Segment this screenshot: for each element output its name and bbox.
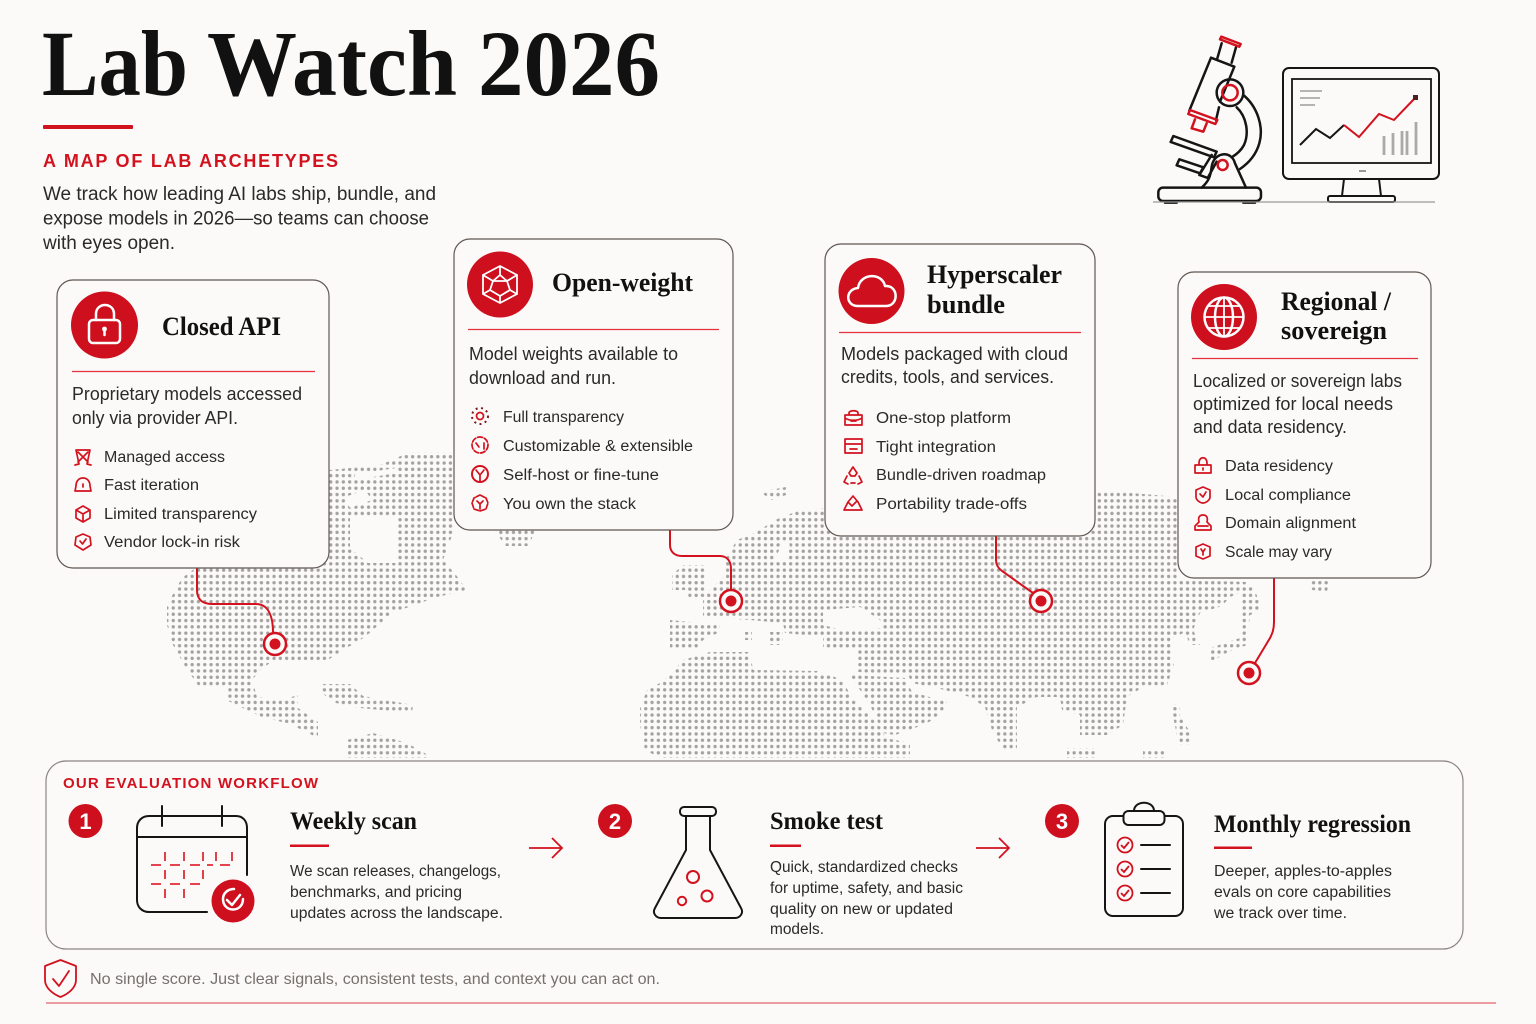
list: regional traits	[1195, 458, 1357, 561]
panel: Closed API	[57, 280, 329, 568]
icon: cloud	[838, 258, 904, 324]
heading: Closed API	[162, 312, 281, 341]
step 2 text: for uptime, safety, and basic	[770, 880, 963, 897]
heading: Regional /	[1281, 287, 1392, 316]
description: optimized for local needs	[1193, 394, 1393, 414]
title	[42, 13, 660, 116]
intro text	[42, 184, 436, 254]
workflow heading: OUR EVALUATION WORKFLOW	[63, 775, 319, 792]
step 3 badge	[1045, 804, 1079, 838]
description	[72, 384, 302, 428]
list: closed API traits	[75, 449, 257, 551]
description	[1193, 371, 1402, 437]
step 2 text: Quick, standardized checks	[770, 859, 958, 876]
step 3 text: Deeper, apples-to-apples	[1214, 863, 1392, 880]
heading	[927, 260, 1062, 319]
intro text: with eyes open.	[42, 233, 175, 254]
step 1 badge: 1	[79, 809, 92, 834]
description: Models packaged with cloud	[841, 344, 1068, 364]
description: Localized or sovereign labs	[1193, 371, 1402, 391]
intro text: expose models in 2026—so teams can choose	[43, 208, 429, 230]
list: closed API traits: Managed access	[104, 449, 225, 466]
footer note: No single score. Just clear signals, consistent tests, and context you can act on.	[90, 971, 660, 988]
panel: Hyperscaler bundle	[825, 244, 1095, 536]
list: regional traits: Domain alignment	[1225, 515, 1357, 532]
connector: open-weight to pin	[670, 530, 742, 612]
pin: hyperscaler	[1030, 590, 1052, 612]
step 2 text: quality on new or updated	[770, 901, 953, 918]
step 3 badge: 3	[1056, 809, 1068, 834]
icon: shield check	[45, 960, 76, 997]
connector: hyperscaler to pin	[996, 536, 1052, 612]
panel: evaluation workflow	[46, 761, 1463, 949]
list: hyperscaler traits: Bundle-driven roadmap	[876, 467, 1046, 484]
list: closed API traits: Vendor lock-in risk	[104, 534, 240, 551]
arrow: step 1 to step 2	[529, 838, 562, 858]
step 1 text: updates across the landscape.	[290, 905, 503, 922]
description: download and run.	[469, 368, 616, 388]
icon: lock	[71, 292, 138, 358]
icon: calendar	[137, 806, 254, 922]
icon: flask	[654, 807, 742, 918]
list: open-weight traits: Customizable & extensible	[503, 438, 693, 455]
illustration: microscope	[1158, 37, 1261, 203]
heading: Hyperscaler	[927, 260, 1062, 289]
pin: open-weight	[720, 590, 742, 612]
list: hyperscaler traits: Tight integration	[876, 439, 996, 456]
title: Lab	[42, 13, 188, 116]
step 1 text: We scan releases, changelogs,	[290, 863, 501, 880]
step 2 text: models.	[770, 921, 824, 938]
step 2 heading: Smoke test	[770, 808, 884, 835]
pin: regional	[1238, 662, 1260, 684]
step 3 heading: Monthly regression	[1214, 811, 1411, 838]
list: regional traits: Local compliance	[1225, 487, 1351, 504]
step 1 text: benchmarks, and pricing	[290, 884, 462, 901]
description: credits, tools, and services.	[841, 367, 1054, 387]
list: closed API traits: Limited transparency	[104, 506, 257, 523]
step 3 text	[1213, 863, 1392, 922]
icon: clipboard	[1105, 803, 1183, 916]
panel: Open-weight	[454, 239, 733, 530]
step 2 badge	[598, 804, 632, 838]
heading: sovereign	[1281, 316, 1388, 345]
connector: closed API to pin	[197, 568, 286, 655]
description: only via provider API.	[72, 408, 238, 428]
list: closed API traits: Fast iteration	[104, 477, 199, 494]
section kicker: A MAP OF LAB ARCHETYPES	[43, 151, 338, 171]
arrow: step 2 to step 3	[976, 838, 1009, 858]
step 1 badge	[68, 804, 102, 838]
description: and data residency.	[1193, 417, 1347, 437]
dotted world map	[160, 445, 1340, 759]
title: 2026	[478, 13, 660, 116]
description	[841, 344, 1068, 387]
list: hyperscaler traits: Portability trade-offs	[876, 496, 1027, 513]
heading	[1281, 287, 1392, 345]
description	[469, 344, 678, 388]
list: open-weight traits: Self-host or fine-tune	[503, 467, 659, 484]
heading: Open-weight	[552, 268, 693, 297]
list: hyperscaler traits: One-stop platform	[876, 410, 1011, 427]
list: regional traits: Data residency	[1225, 458, 1333, 475]
panel: Regional / sovereign	[1178, 272, 1431, 578]
step 2 text	[770, 859, 963, 938]
icon: network cube	[467, 252, 533, 318]
list: open-weight traits: Full transparency	[503, 409, 624, 426]
step 3 text: evals on core capabilities	[1214, 884, 1391, 901]
list: open-weight traits: You own the stack	[503, 496, 636, 513]
list: regional traits: Scale may vary	[1225, 544, 1332, 561]
step 1 text	[290, 863, 503, 922]
step 3 text: we track over time.	[1213, 905, 1347, 922]
list: open-weight traits	[472, 408, 693, 513]
description: Model weights available to	[469, 344, 678, 364]
step 2 badge: 2	[609, 809, 621, 834]
list: hyperscaler traits	[844, 410, 1046, 513]
step 1 heading: Weekly scan	[290, 808, 417, 835]
intro text: We track how leading AI labs ship, bundle, and	[43, 184, 436, 205]
connector: regional to pin	[1238, 578, 1274, 684]
illustration: monitor with chart	[1153, 68, 1439, 202]
description: Proprietary models accessed	[72, 384, 302, 404]
heading: bundle	[927, 290, 1005, 319]
icon: globe	[1191, 284, 1257, 350]
title rule	[43, 125, 133, 129]
pin: closed API	[264, 633, 286, 655]
title: Watch	[207, 13, 457, 116]
